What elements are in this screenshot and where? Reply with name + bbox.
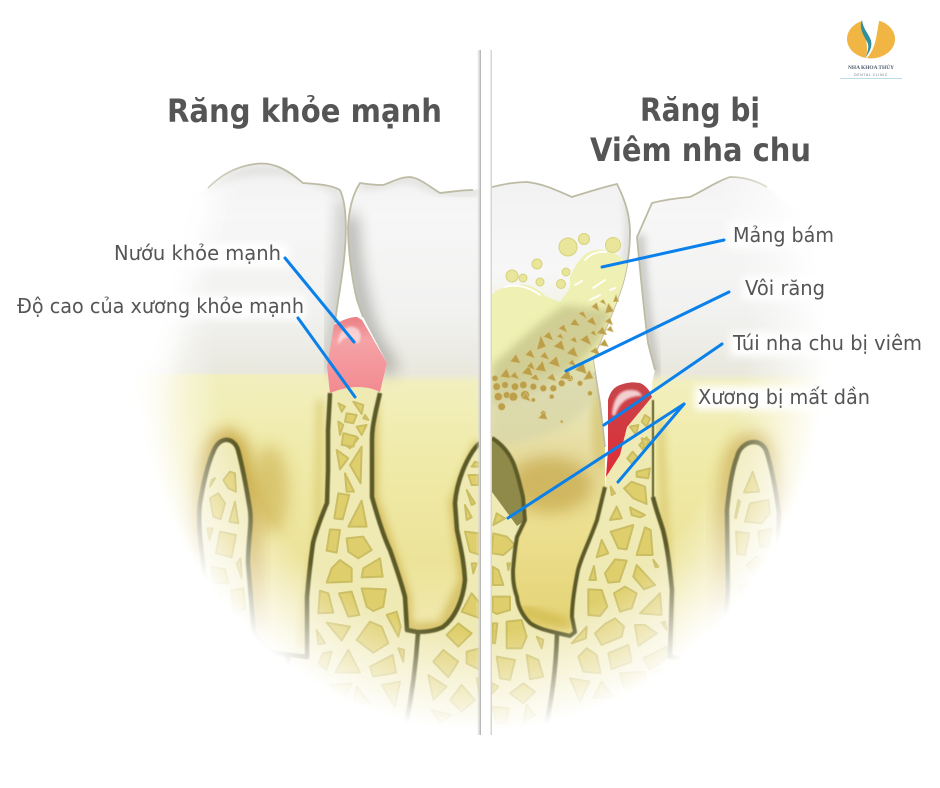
title: periodontitis tooth [590, 91, 811, 169]
bone cells: right crest [630, 415, 650, 450]
logo tagline: DENTAL CLINIC [854, 73, 888, 77]
logo [840, 17, 902, 78]
panel: periodontitis tooth illustration [492, 176, 814, 724]
label: healthy bone height: Độ cao của xương khỏe mạnh [17, 294, 304, 318]
label: bone loss: Xương bị mất dần [698, 385, 870, 409]
divider [476, 50, 492, 735]
panel: healthy tooth illustration [152, 162, 479, 724]
title: healthy tooth: Răng khỏe mạnh [167, 92, 442, 130]
leader lines [285, 240, 729, 518]
root outlines [199, 393, 480, 725]
title: periodontitis tooth: Răng bị [640, 91, 760, 129]
plaque [492, 234, 632, 445]
inflamed pocket gum [606, 382, 652, 477]
healthy gum [327, 317, 387, 393]
title: periodontitis tooth: Viêm nha chu [590, 131, 811, 169]
healthy bone base [201, 384, 479, 720]
label: tartar: Vôi răng [745, 276, 825, 300]
logo mark [847, 17, 895, 59]
left healthy tooth [148, 162, 347, 645]
label: plaque: Mảng bám [733, 223, 834, 247]
diseased tooth [492, 182, 630, 636]
tartar [492, 295, 619, 423]
bone cells: crest [338, 402, 368, 447]
bone cells: right panel [492, 437, 772, 723]
right tooth of healthy side [348, 177, 480, 632]
right tooth of diseased side [636, 176, 814, 634]
bone cells: lower left [207, 433, 480, 723]
root outlines [492, 400, 779, 730]
label halos [10, 222, 925, 410]
logo name: NHA KHOA THÚY [848, 63, 894, 71]
diseased bone base [492, 397, 776, 720]
label: healthy gum: Nướu khỏe mạnh [114, 241, 281, 265]
olive pocket [492, 438, 525, 526]
label: inflamed pocket: Túi nha chu bị viêm [732, 331, 922, 355]
